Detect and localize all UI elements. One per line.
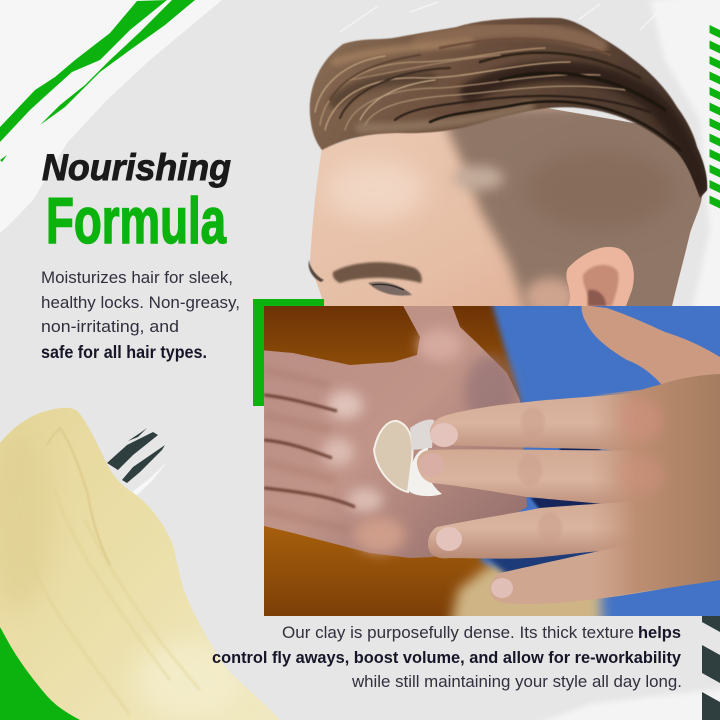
dark gaps — [530, 446, 600, 510]
left hand palm — [260, 300, 527, 558]
index finger — [430, 393, 632, 450]
bottom text: Our clay is purposefully dense. Its thick texture — [282, 623, 634, 642]
thumb — [582, 305, 720, 385]
photo: man's head with styled hair — [300, 18, 720, 320]
dark stripes bottom right — [702, 616, 720, 720]
description text — [41, 268, 240, 362]
eyebrow — [309, 260, 422, 283]
heading line: Formula: Formula — [46, 184, 227, 257]
ring finger — [428, 502, 633, 559]
heading line: Nourishing: Nourishing — [42, 147, 231, 188]
dark shadow under fingers — [485, 551, 598, 574]
blue shirt — [480, 290, 720, 640]
clay on palm — [374, 419, 442, 496]
heading — [42, 147, 231, 257]
bottom text: control fly aways, boost volume, and allow for re-workability — [212, 648, 682, 667]
dark brush accent — [107, 428, 165, 483]
green brush strokes top left — [0, 0, 195, 162]
bottom text: while still maintaining your style all day long. — [351, 672, 682, 691]
photo: hands applying clay — [264, 306, 720, 616]
hair base — [310, 18, 707, 198]
clay smear — [0, 400, 285, 720]
eye — [368, 282, 412, 296]
green stripes right edge — [710, 25, 720, 208]
head silhouette with skin and fade — [310, 108, 702, 306]
hair strands — [315, 30, 700, 185]
ear — [566, 247, 634, 306]
description text: healthy locks. Non-greasy, — [41, 293, 240, 312]
white brush accent — [132, 462, 167, 496]
bottom text — [212, 623, 682, 691]
green frame behind photo — [253, 299, 324, 406]
little finger — [490, 548, 672, 604]
green corner bottom left — [0, 625, 85, 720]
bottom text: helps — [638, 623, 681, 642]
description text: Moisturizes hair for sleek, — [41, 268, 233, 287]
middle finger — [416, 449, 632, 504]
photo background — [264, 306, 524, 616]
description text: non-irritating, and — [41, 317, 179, 336]
cream blur bottom — [444, 559, 611, 616]
description text: safe for all hair types. — [41, 342, 207, 362]
right hand back — [590, 374, 720, 600]
